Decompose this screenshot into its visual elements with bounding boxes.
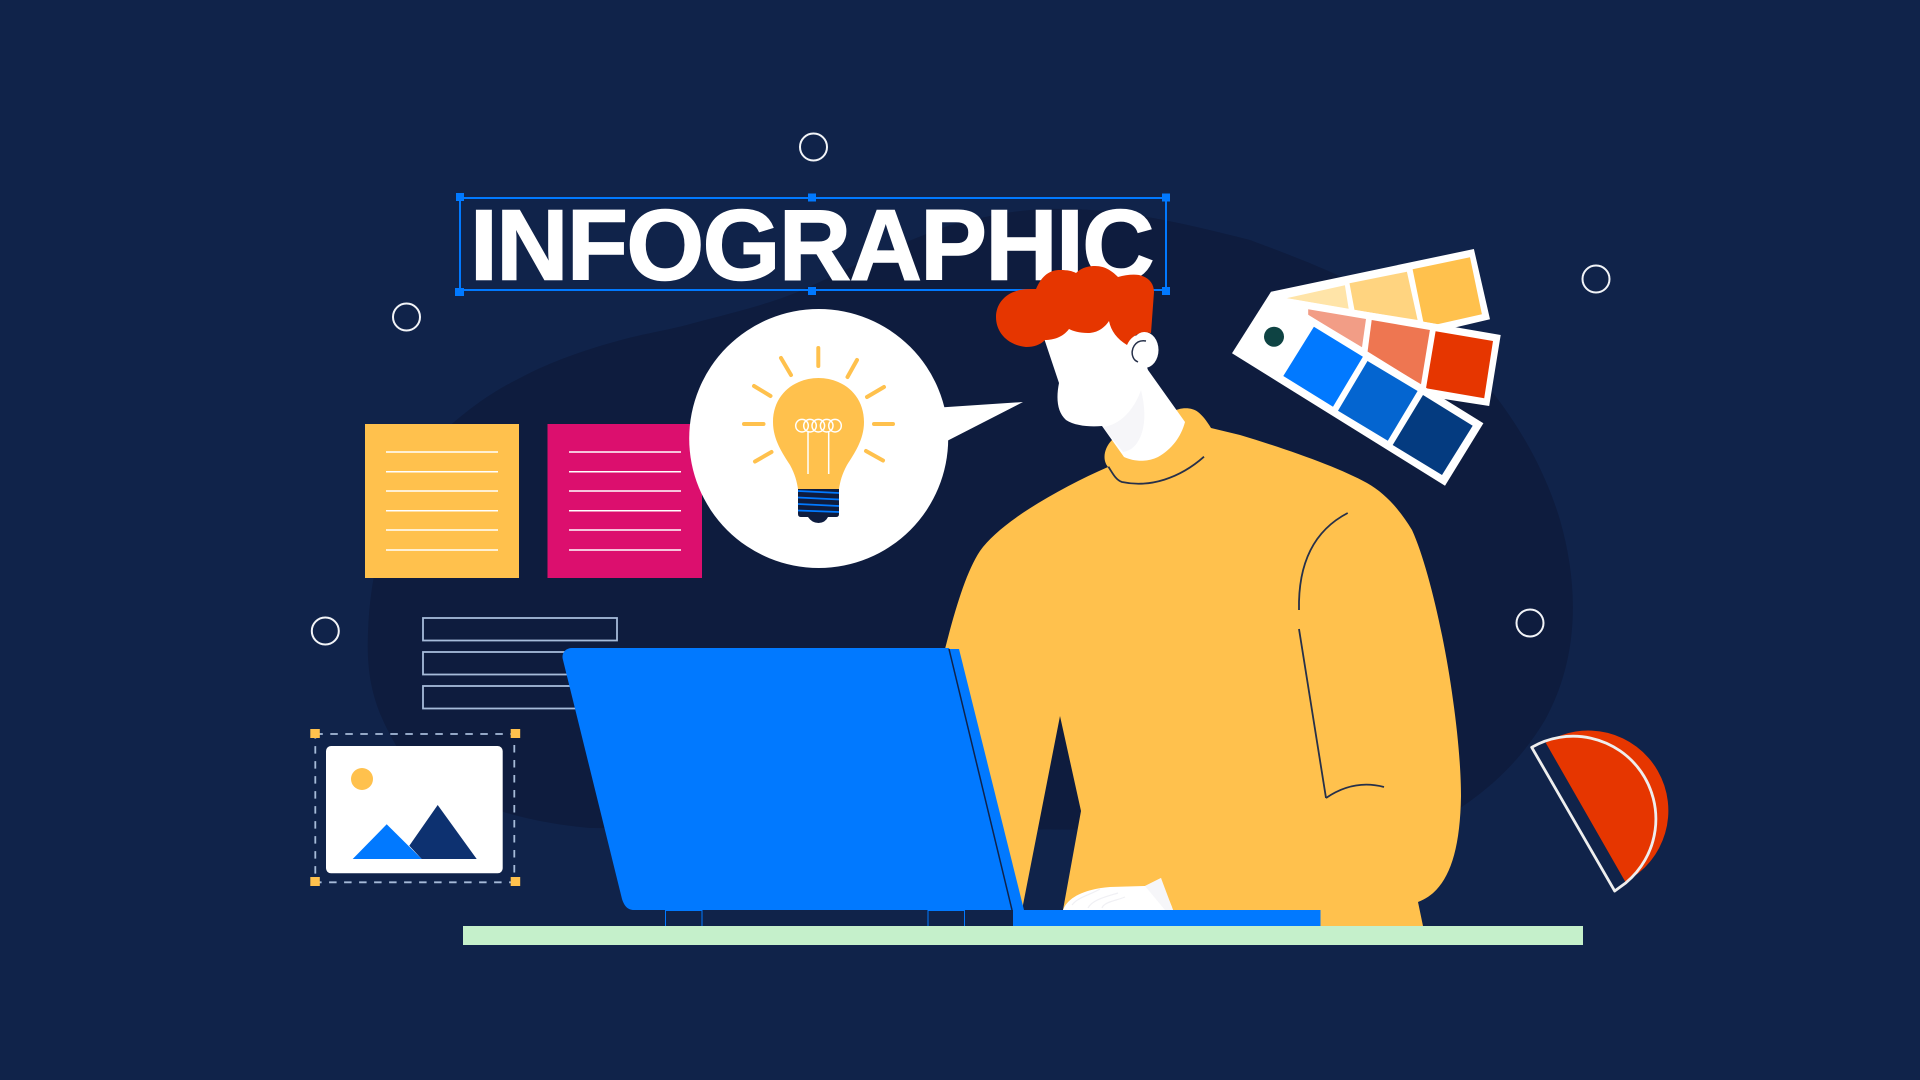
hair xyxy=(996,266,1154,347)
image placeholder xyxy=(310,729,520,886)
person xyxy=(945,266,1461,926)
laptop feet xyxy=(666,910,964,926)
swatch strip: yellow xyxy=(1271,249,1490,331)
decorative circles xyxy=(312,134,1609,644)
outlined text boxes xyxy=(423,618,617,708)
title selection frame xyxy=(455,193,1170,296)
lightbulb glass xyxy=(773,378,864,489)
filament xyxy=(796,419,841,474)
laptop xyxy=(562,648,1320,926)
paper on desk xyxy=(1063,878,1173,910)
sweater seam lines xyxy=(1108,457,1384,798)
title: INFOGRAPHIC xyxy=(470,190,1154,302)
ear xyxy=(1130,332,1158,368)
note: yellow xyxy=(365,424,519,578)
background blob xyxy=(368,209,1573,830)
neck and face xyxy=(1045,320,1185,461)
speech bubble with lightbulb xyxy=(689,309,1023,568)
laptop side edge xyxy=(949,649,1024,910)
desk xyxy=(463,926,1583,945)
swatch strip: orange xyxy=(1271,292,1501,406)
laptop lid xyxy=(562,648,1012,910)
laptop base xyxy=(1013,910,1320,926)
half-circle shape xyxy=(1532,731,1668,891)
neck shadow xyxy=(1103,390,1144,452)
lightbulb socket xyxy=(798,489,839,523)
colour swatch fan xyxy=(1232,249,1501,486)
sweater xyxy=(945,408,1461,926)
lightbulb rays xyxy=(744,348,893,462)
note: pink xyxy=(548,424,702,578)
swatch strip: blue xyxy=(1232,292,1483,486)
